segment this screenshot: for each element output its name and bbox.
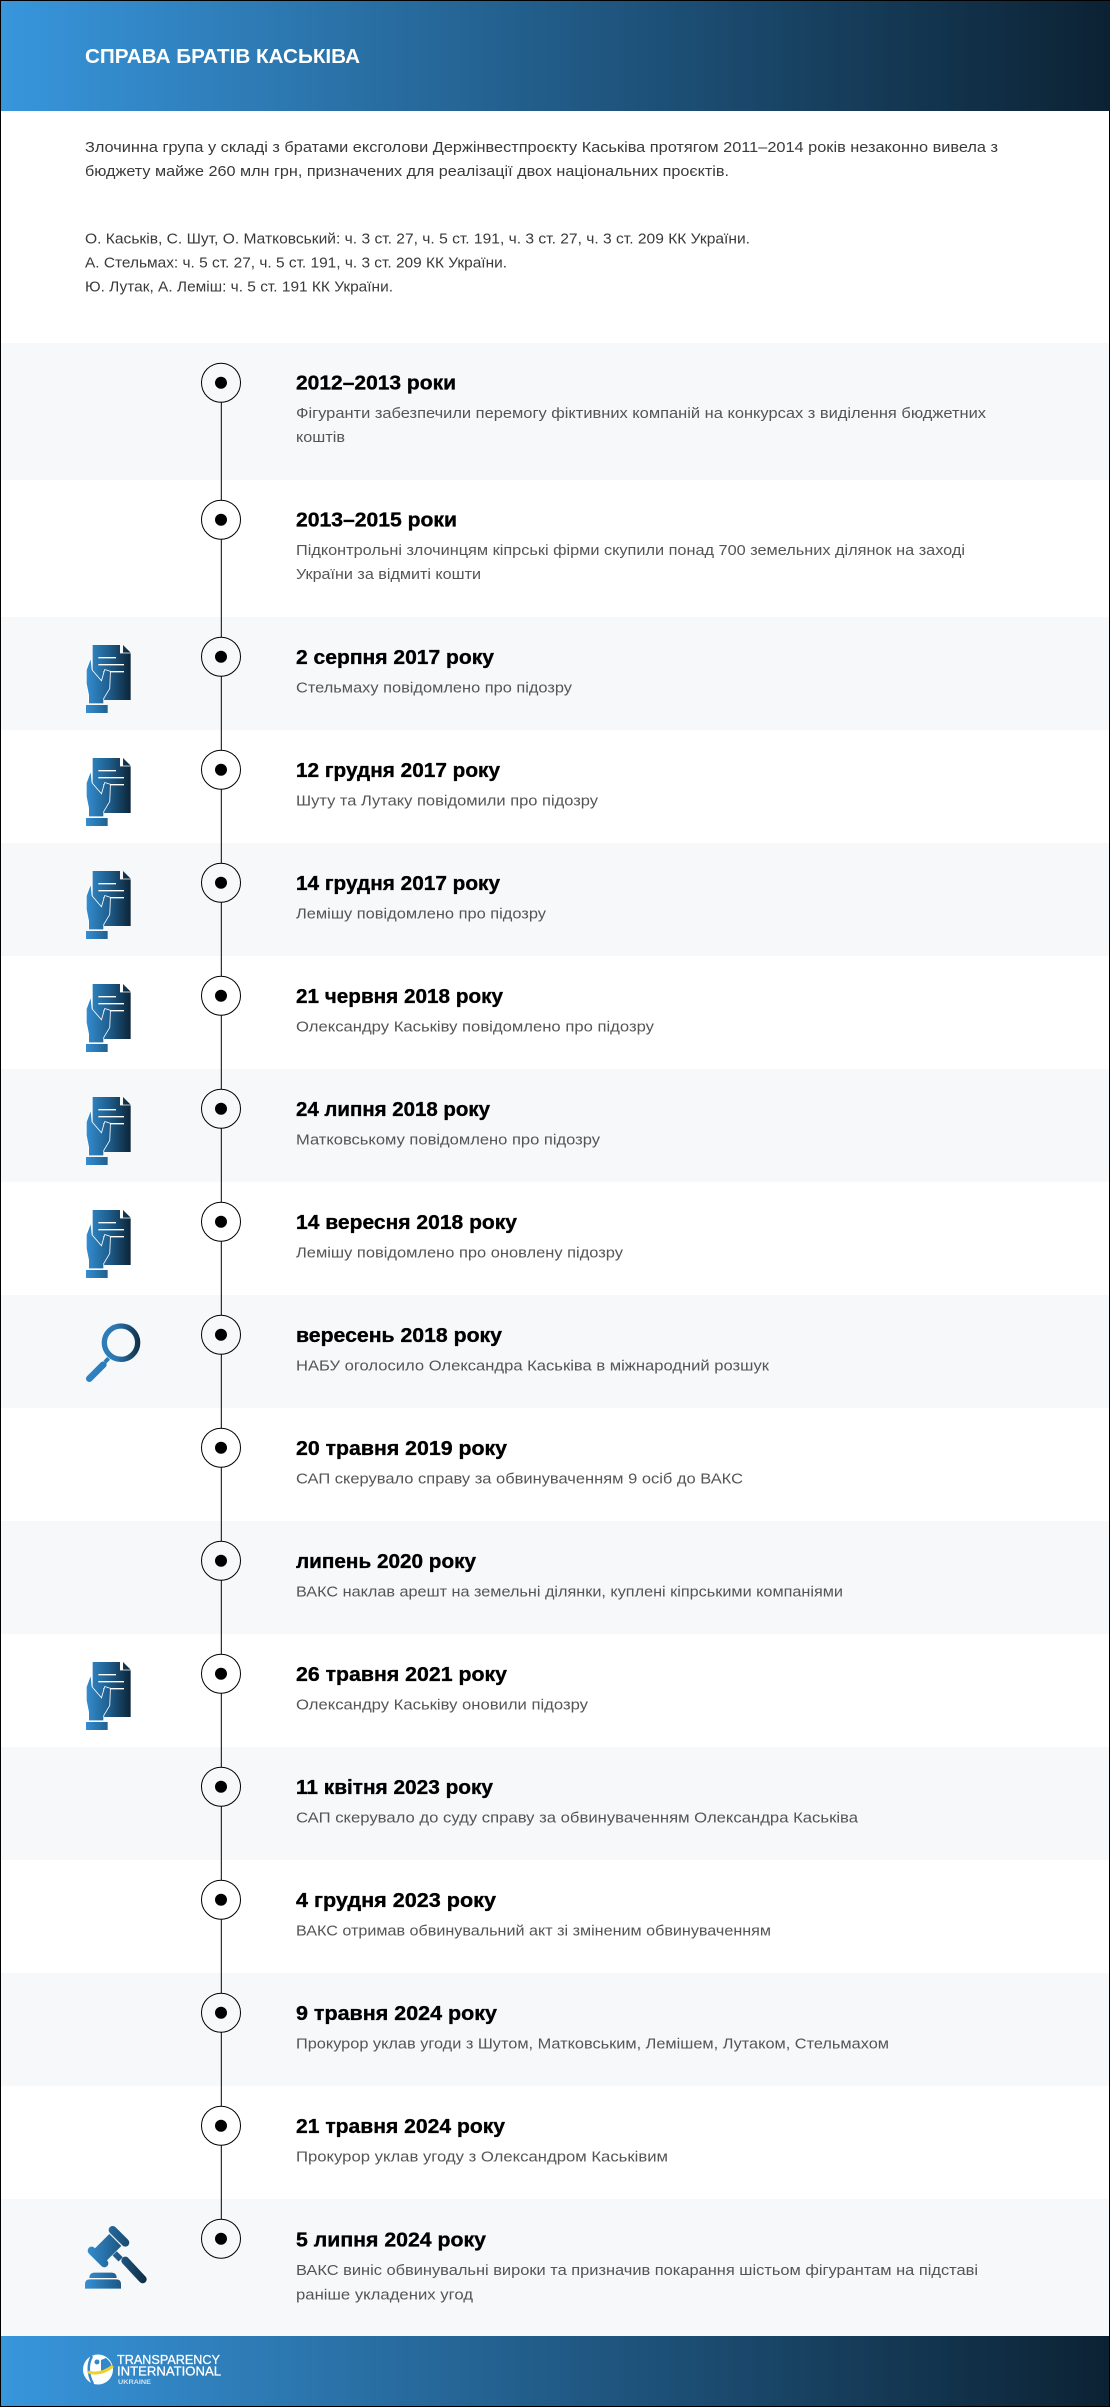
timeline row: вересень 2018 xyxy=(0,1241,1110,1408)
description: Стельмаху повідомлено про підозру xyxy=(296,680,573,696)
description: ВАКС виніс обвинувальні вироки та призначив покарання шістьом фігурантам на підставі xyxy=(296,2262,978,2279)
description: України за відмиті кошти xyxy=(296,566,481,583)
date: 4 грудня 2023 року xyxy=(296,1890,497,1912)
marker xyxy=(202,1654,240,1693)
date: 14 вересня 2018 року xyxy=(296,1212,518,1234)
description: Олександру Каськіву повідомлено про підозру xyxy=(296,1018,655,1036)
description: Лемішу повідомлено про підозру xyxy=(296,906,547,922)
marker xyxy=(202,2106,240,2145)
intro text: бюджету майже 260 млн грн, призначених для реалізації двох національних проєктів. xyxy=(85,163,729,180)
date: 2012–2013 роки xyxy=(296,372,456,394)
description: Прокурор уклав угоди з Шутом, Матковським, Лемішем, Лутаком, Стельмахом xyxy=(296,2036,889,2052)
marker xyxy=(202,1541,240,1580)
date: 26 травня 2021 року xyxy=(296,1664,508,1686)
timeline row: 24 липня 2018 xyxy=(0,1015,1110,1182)
marker xyxy=(202,1993,240,2032)
timeline row: 5 липня 2024 xyxy=(0,2145,1110,2336)
timeline row: 12 грудня 2017 xyxy=(0,676,1110,843)
marker xyxy=(202,863,240,902)
header banner xyxy=(0,0,1110,111)
icon: document in hand xyxy=(86,1662,131,1730)
legal charges text: А. Стельмах: ч. 5 ст. 27, ч. 5 ст. 191, ч. 3 ст. 209 КК України. xyxy=(85,254,507,272)
marker xyxy=(202,363,240,402)
description: Олександру Каськіву оновили підозру xyxy=(296,1696,589,1714)
date: липень 2020 року xyxy=(296,1551,477,1573)
legal charges text: О. Каськів, С. Шут, О. Матковський: ч. 3 ст. 27, ч. 5 ст. 191, ч. 3 ст. 27, ч. 3 ст. 209 КК України. xyxy=(85,230,750,248)
logo text: INTERNATIONAL xyxy=(117,2364,221,2379)
timeline row: липень 2020 xyxy=(0,1467,1110,1634)
timeline row: 21 травня 2024 xyxy=(0,2032,1110,2199)
date: 11 квітня 2023 року xyxy=(296,1777,494,1799)
logo globe xyxy=(83,2354,113,2384)
icon: document in hand xyxy=(86,871,131,939)
date: 21 травня 2024 року xyxy=(296,2116,506,2138)
icon: document in hand xyxy=(86,758,131,826)
timeline row: 20 травня 2019 xyxy=(0,1354,1110,1521)
logo: Transparency International Ukraine xyxy=(83,2352,221,2386)
description xyxy=(296,542,965,583)
marker xyxy=(202,1202,240,1241)
description: Фігуранти забезпечили перемогу фіктивних компаній на конкурсах з виділення бюджетних xyxy=(296,405,987,422)
intro text: Злочинна група у складі з братами ексголови Держінвестпроєкту Каськіва протягом 2011–2014 років незаконно вивела з xyxy=(85,139,998,156)
description: Прокурор уклав угоду з Олександром Каськівим xyxy=(296,2148,668,2166)
marker xyxy=(202,2219,240,2258)
timeline row: 14 вересня 2018 xyxy=(0,1128,1110,1295)
footer banner xyxy=(0,2336,1110,2407)
marker xyxy=(202,1767,240,1806)
marker xyxy=(202,500,240,539)
description: Підконтрольні злочинцям кіпрські фірми скупили понад 700 земельних ділянок на заході xyxy=(296,542,965,559)
date: 12 грудня 2017 року xyxy=(296,760,501,782)
date: 14 грудня 2017 року xyxy=(296,873,501,895)
marker xyxy=(202,1880,240,1919)
description: раніше укладених угод xyxy=(296,2286,473,2304)
description: САП скерувало справу за обвинуваченням 9 осіб до ВАКС xyxy=(296,1470,743,1488)
logo text xyxy=(117,2352,221,2386)
timeline row: 2013–2015 xyxy=(0,402,1110,617)
description: ВАКС наклав арешт на земельні ділянки, куплені кіпрськими компаніями xyxy=(296,1584,843,1600)
timeline row: 4 грудня 2023 xyxy=(0,1806,1110,1973)
description: НАБУ оголосило Олександра Каськіва в міжнародний розшук xyxy=(296,1358,769,1374)
description: Матковському повідомлено про підозру xyxy=(296,1132,601,1148)
date: 20 травня 2019 року xyxy=(296,1438,508,1460)
description xyxy=(296,405,987,446)
timeline row: 26 травня 2021 xyxy=(0,1580,1110,1747)
description xyxy=(296,2262,978,2304)
marker xyxy=(202,976,240,1015)
date: 2013–2015 роки xyxy=(296,510,457,532)
timeline row: 11 квітня 2023 xyxy=(0,1693,1110,1860)
description: САП скерувало до суду справу за обвинуваченням Олександра Каськіва xyxy=(296,1810,859,1826)
date: вересень 2018 року xyxy=(296,1325,503,1347)
title: СПРАВА БРАТІВ КАСЬКІВА xyxy=(85,46,360,68)
date: 21 червня 2018 року xyxy=(296,986,504,1008)
timeline row: 2 серпня 2017 xyxy=(0,539,1110,730)
description: Шуту та Лутаку повідомили про підозру xyxy=(296,792,599,810)
marker xyxy=(202,1315,240,1354)
marker xyxy=(202,1089,240,1128)
date: 2 серпня 2017 року xyxy=(296,647,495,669)
marker xyxy=(202,637,240,676)
icon: gavel xyxy=(85,2230,143,2289)
date: 9 травня 2024 року xyxy=(296,2003,498,2025)
description: Лемішу повідомлено про оновлену підозру xyxy=(296,1244,624,1262)
icon: document in hand xyxy=(86,645,131,713)
marker xyxy=(202,1428,240,1467)
description: коштів xyxy=(296,429,345,446)
logo text: TRANSPARENCY xyxy=(117,2352,220,2367)
timeline row: 14 грудня 2017 xyxy=(0,789,1110,956)
timeline row: 21 червня 2018 xyxy=(0,902,1110,1069)
logo text: UKRAINE xyxy=(118,2379,152,2386)
icon: magnifier xyxy=(89,1326,138,1379)
icon: document in hand xyxy=(86,1097,131,1165)
marker xyxy=(202,750,240,789)
legal charges text: Ю. Лутак, А. Леміш: ч. 5 ст. 191 КК України. xyxy=(85,278,393,296)
date: 5 липня 2024 року xyxy=(296,2230,487,2252)
timeline row: 9 травня 2024 xyxy=(0,1919,1110,2086)
icon: document in hand xyxy=(86,1210,131,1278)
intro text xyxy=(85,139,998,180)
description: ВАКС отримав обвинувальний акт зі зміненим обвинуваченням xyxy=(296,1922,771,1940)
date: 24 липня 2018 року xyxy=(296,1099,491,1121)
icon: document in hand xyxy=(86,984,131,1052)
timeline row: 2012–2013 xyxy=(0,343,1110,480)
legal charges text xyxy=(85,230,750,296)
